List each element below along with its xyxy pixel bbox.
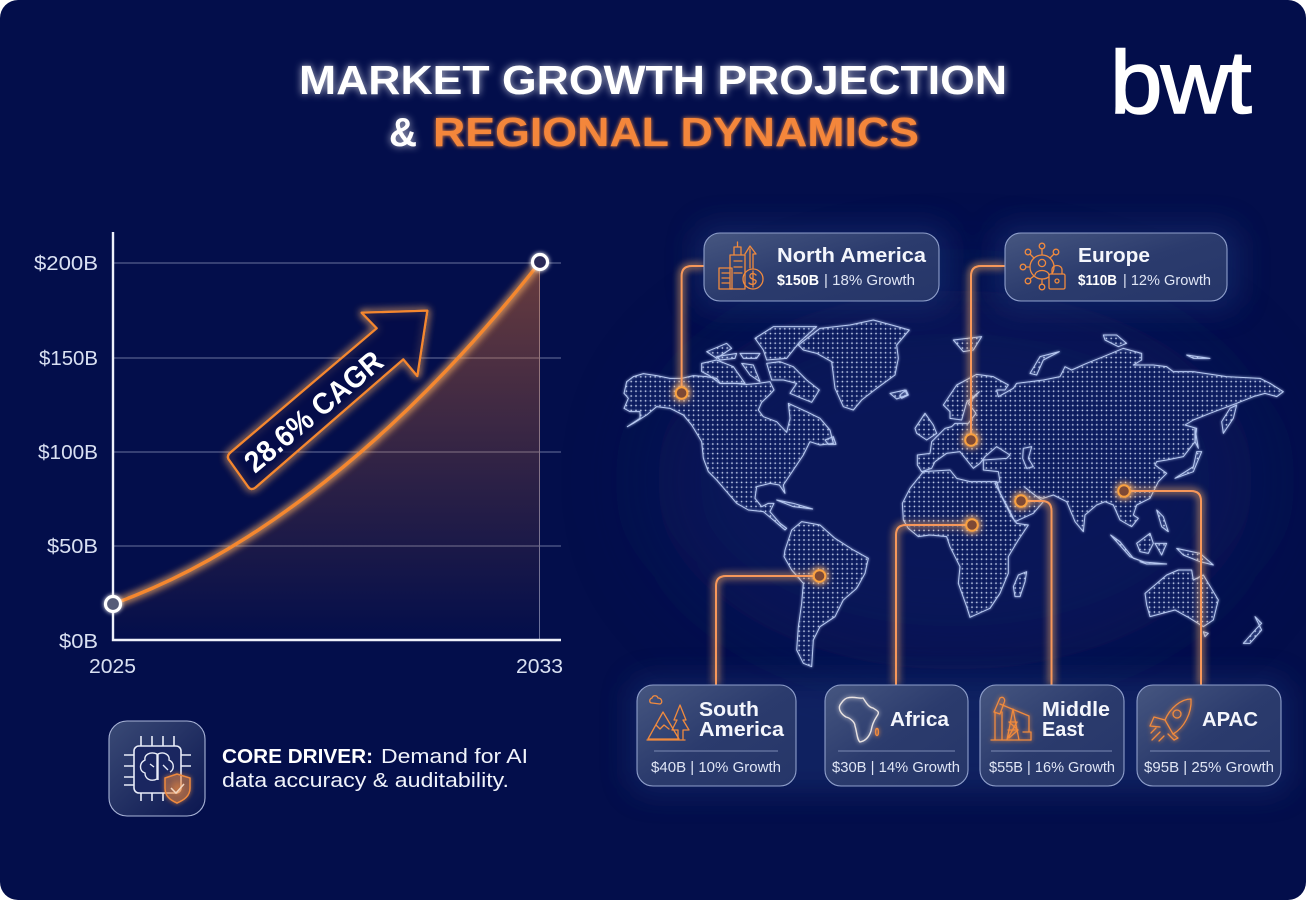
- panel: North America: North America: [777, 245, 927, 267]
- line chart: [34, 232, 563, 678]
- title: REGIONAL DYNAMICS: [433, 109, 919, 155]
- panel: South America: $40B | 10% Growth: [651, 760, 781, 776]
- panel: North America: [704, 233, 939, 301]
- panel: Africa: [825, 685, 968, 786]
- chart area fill: [113, 262, 540, 640]
- panel: Europe: | 12% Growth: [1123, 273, 1211, 289]
- panel: Africa: $30B | 14% Growth: [832, 760, 960, 776]
- chart axes: [113, 232, 561, 640]
- panel: APAC: APAC: [1202, 709, 1258, 731]
- icon: AI chip with shield: [109, 721, 205, 816]
- panel: Africa: Africa: [890, 709, 950, 731]
- map dot fill: [620, 315, 1300, 680]
- panel: Middle East: Middle: [1042, 699, 1110, 721]
- icon: oil pump: [991, 697, 1031, 740]
- panel: Middle East: [980, 685, 1124, 786]
- callout text: [222, 745, 528, 792]
- connector: Europe: [965, 266, 1005, 446]
- x-axis labels: 2033: [516, 656, 563, 678]
- growth curve: [113, 262, 540, 604]
- icon: rocket: [1150, 699, 1191, 741]
- panel: South America: [637, 685, 796, 786]
- title: MARKET GROWTH PROJECTION: [299, 57, 1007, 103]
- map outlines: [624, 320, 1283, 667]
- connector: South America: [716, 570, 825, 685]
- CAGR arrow: [228, 311, 427, 489]
- panel: South America: South: [699, 699, 759, 721]
- y-axis labels: [34, 253, 98, 653]
- chart grid lines: [113, 263, 561, 640]
- panel: Middle East: $55B | 16% Growth: [989, 760, 1115, 776]
- panel: North America: | 18% Growth: [824, 273, 915, 289]
- panel: Europe: [1005, 233, 1227, 301]
- icon: mountains and tree: [647, 696, 689, 740]
- icon: Africa outline: [839, 697, 878, 742]
- panel: Europe: $110B: [1078, 273, 1117, 289]
- callout text: Demand for AI: [381, 745, 528, 768]
- connector: Africa: [896, 519, 978, 685]
- icon: city and dollar: [719, 242, 763, 289]
- connector: APAC: [1118, 485, 1201, 685]
- callout text: CORE DRIVER:: [222, 745, 373, 768]
- y-axis labels: $200B: [34, 253, 98, 275]
- logo: bwt: bwt: [1110, 33, 1252, 132]
- icon: network and lock: [1020, 243, 1065, 290]
- y-axis labels: $50B: [47, 536, 98, 558]
- y-axis labels: $0B: [59, 631, 98, 653]
- panel: Europe: Europe: [1078, 245, 1150, 267]
- y-axis labels: $100B: [38, 442, 98, 464]
- x-axis labels: [89, 656, 563, 678]
- connector: Middle East: [1015, 495, 1052, 685]
- connector: North America: [676, 266, 704, 399]
- panel: Middle East: East: [1042, 719, 1084, 741]
- panel: North America: $150B: [777, 273, 819, 289]
- title: &: [389, 109, 417, 155]
- CAGR arrow: 28.6% CAGR: [238, 345, 390, 479]
- world map: [620, 315, 1300, 680]
- start point marker: [106, 596, 120, 612]
- y-axis labels: $150B: [39, 348, 98, 370]
- panel: APAC: [1137, 685, 1281, 786]
- core driver callout: [109, 721, 528, 816]
- map glow: [630, 225, 1290, 793]
- x-axis labels: 2025: [89, 656, 136, 678]
- panel: APAC: $95B | 25% Growth: [1144, 760, 1274, 776]
- end point marker: [532, 254, 548, 270]
- callout text: data accuracy & auditability.: [222, 769, 509, 792]
- title: [299, 57, 1007, 155]
- panel: South America: America: [699, 719, 785, 741]
